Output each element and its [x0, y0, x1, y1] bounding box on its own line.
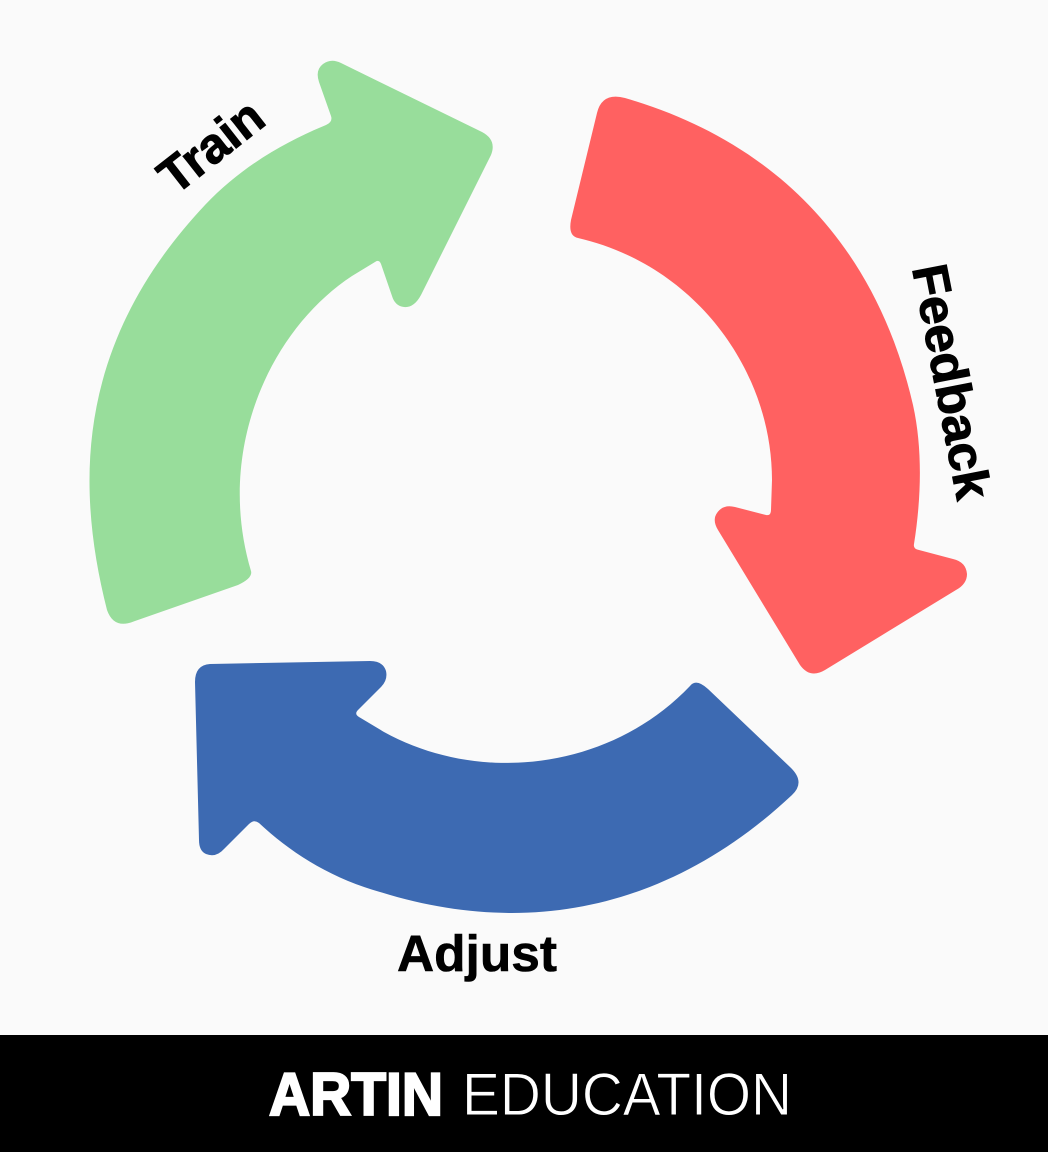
label: train: Train [147, 88, 275, 205]
label: adjust: Adjust [397, 925, 557, 982]
arrow: adjust (blue) [195, 661, 799, 913]
arrow: train (green) [90, 61, 493, 624]
footer brand: education: EDUCATION [462, 1061, 792, 1128]
label: feedback: Feedback [901, 259, 1002, 504]
arrow: feedback (red) [570, 97, 967, 674]
footer bar [0, 1035, 1048, 1152]
footer brand: artin: ARTIN [269, 1061, 443, 1128]
